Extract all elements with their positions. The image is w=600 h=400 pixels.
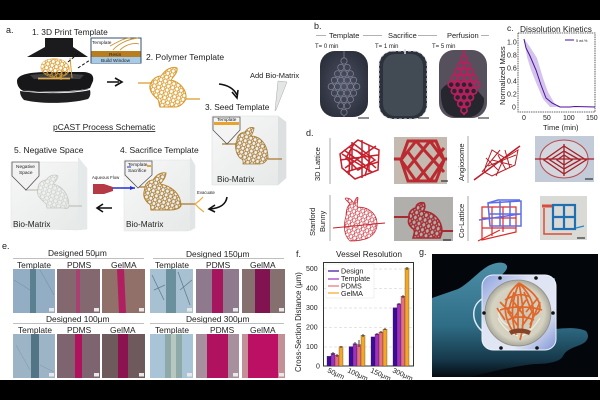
separators (330, 136, 468, 241)
bio-matrix cube step 4 sacrifice: Sacrifice (128, 168, 147, 174)
row labels: Co-Lattice (457, 204, 466, 238)
time labels (315, 44, 456, 50)
error bars (333, 267, 407, 357)
x axis labels: 300μm (391, 367, 414, 383)
bio-matrix cube step 4 sacrifice: Bio-Matrix (126, 219, 164, 229)
arrow: step 3 to 4 (209, 197, 227, 212)
legend: Design (341, 266, 363, 276)
y axis labels: 0 (512, 104, 516, 112)
y axis labels: 0.8 (507, 52, 517, 60)
grid (324, 269, 413, 347)
x axis labels: 50 (543, 115, 551, 122)
legend: 5 wt.% (576, 39, 588, 43)
group heading 100um (13, 314, 144, 324)
gloved hand (432, 263, 588, 377)
time labels: T= 1 min (375, 44, 399, 50)
group heading 150um (153, 249, 284, 259)
bio-matrix cube step 5 negative space: Space (19, 170, 33, 176)
micrographs 150um (150, 269, 285, 313)
icon: aqueous flow needle (92, 175, 135, 194)
plot frame (518, 33, 595, 112)
icon: 3D printer (17, 38, 93, 103)
black band top (0, 0, 600, 20)
y axis labels: 1.0 (507, 40, 517, 46)
panel e: vessel micrographs (2, 241, 285, 378)
black band bottom (0, 380, 600, 400)
panel label e: e. (2, 241, 10, 251)
screws (482, 276, 555, 350)
row labels: Stanford (308, 208, 317, 236)
bio-matrix cube step 4 sacrifice: Template (128, 162, 148, 168)
panel label d: d. (306, 128, 314, 138)
row labels: 3D Lattice (313, 147, 322, 181)
x axis labels: 50μm (326, 367, 345, 381)
bars 150um (371, 329, 387, 366)
column headers (316, 31, 489, 40)
column headers: Sacrifice (388, 31, 417, 40)
y axis labels (507, 40, 517, 112)
column headers: GelMA (250, 260, 276, 270)
arrow: step 1 to 2 (107, 78, 122, 86)
inset: build window: Resin (109, 52, 122, 58)
capsule sacrifice (379, 49, 427, 119)
step 2 heading: 2. Polymer Template (146, 52, 224, 62)
bio-matrix cube step 5 negative space: Bio-Matrix (13, 219, 51, 229)
y axis labels: 0.6 (507, 66, 517, 72)
column headers: Template (18, 325, 52, 335)
x axis labels: 150μm (369, 367, 392, 383)
panel f: vessel resolution bar chart (294, 249, 414, 383)
bio-matrix cube step 3: Bio-Matrix (217, 174, 255, 184)
evacuate flow (195, 190, 216, 212)
capsule perfusion (439, 50, 487, 118)
column headers: PDMS (67, 325, 92, 335)
column headers: Template (155, 325, 189, 335)
arrow: step 2 to 3 (219, 84, 238, 98)
y axis labels: 0.2 (507, 92, 517, 98)
inset: build window (91, 38, 141, 64)
y axis labels: 400 (306, 286, 318, 292)
chart title: Vessel Resolution (336, 249, 402, 259)
x axis labels: 100 (563, 115, 575, 122)
panel a: pCAST process schematic (6, 25, 299, 231)
model: co-lattice (478, 200, 521, 241)
y axis labels: 100 (306, 344, 318, 351)
bio-matrix cube step 4 sacrifice (124, 156, 195, 231)
confidence band (525, 40, 562, 107)
schematic title: pCAST Process Schematic (53, 122, 156, 132)
scale bars (49, 308, 284, 376)
panel b: template sacrifice perfusion (314, 21, 489, 119)
photo: 3D lattice (394, 137, 448, 184)
panel label b: b. (314, 21, 322, 31)
panel g: photo of device in gloved hand (419, 247, 598, 377)
step 1 heading: 1. 3D Print Template (32, 27, 108, 37)
model: angiosome (474, 146, 520, 180)
micrographs 300um (150, 334, 285, 378)
bio-matrix cube step 3 (212, 116, 286, 185)
column headers (17, 260, 276, 335)
bio-matrix cube step 3: Template (217, 117, 237, 123)
model: 3D lattice (340, 140, 379, 179)
device housing (482, 275, 556, 350)
y axis labels: 0 (316, 364, 320, 370)
arrow: step 5 from 4 (97, 204, 112, 212)
micrographs 50um (13, 269, 145, 313)
column headers: Template (17, 260, 51, 270)
row labels (308, 143, 466, 238)
y axis labels: 0.4 (507, 78, 517, 86)
polymer template bunny (138, 67, 200, 107)
column headers: Template (329, 31, 359, 40)
x axis title: Time (min) (543, 123, 579, 132)
photo: angiosome (535, 136, 594, 182)
photo background (432, 254, 598, 377)
bars 50um (327, 347, 343, 366)
dissolution curve (524, 39, 595, 107)
bio-matrix cube step 5 negative space: Negative (16, 164, 35, 170)
bio-matrix cube step 5 negative space (11, 157, 87, 230)
tube loop (474, 299, 482, 331)
column headers: PDMS (67, 260, 92, 270)
time labels: T= 0 min (315, 44, 339, 50)
y axis labels: 300 (306, 305, 318, 312)
model: stanford bunny (333, 197, 385, 241)
column headers: GelMA (110, 325, 136, 335)
column headers: PDMS (210, 325, 235, 335)
group heading 300um: Designed 300μm (186, 314, 250, 324)
panel label a: a. (6, 25, 14, 35)
row labels: Angiosome (457, 143, 466, 181)
legend: Template (341, 274, 370, 283)
inset: build window: Template (92, 40, 112, 46)
bars 100um (349, 335, 365, 366)
group heading 300um (150, 314, 284, 324)
x axis labels (326, 367, 414, 383)
column headers: Perfusion (447, 31, 479, 40)
bars 300um (393, 268, 409, 366)
legend (326, 264, 374, 298)
inset: build window: Build Window (101, 58, 131, 64)
icon: pipette (275, 81, 287, 111)
scale bars (358, 117, 489, 119)
panel label g: g. (419, 247, 427, 257)
y axis title: Cross-Section Distance (μm) (294, 272, 303, 372)
group heading 100um: Designed 100μm (46, 314, 110, 324)
time labels: T= 5 min (432, 44, 456, 50)
icon: aqueous flow needle: Aqueous Flow (92, 175, 120, 180)
capsule template (320, 51, 368, 117)
legend: GelMA (341, 289, 363, 298)
column headers: PDMS (206, 260, 231, 270)
panel label f: f. (296, 249, 301, 259)
chart title: Dissolution Kinetics (520, 24, 592, 34)
legend: PDMS (341, 282, 362, 290)
x axis labels: 150 (586, 115, 598, 122)
micrographs 100um (13, 334, 145, 378)
faint unfilled vessels (498, 308, 540, 336)
y axis labels (306, 266, 320, 370)
photo: co-lattice (540, 196, 587, 240)
row labels: Bunny (318, 210, 327, 232)
group heading 150um: Designed 150μm (186, 249, 250, 259)
photo: stanford bunny (394, 197, 453, 241)
y axis title: Normalized Mass (498, 46, 507, 105)
y axis labels: 200 (306, 324, 318, 332)
column headers: GelMA (111, 260, 137, 270)
add bio-matrix label: Add Bio-Matrix (250, 71, 299, 80)
column headers: GelMA (250, 325, 276, 335)
group heading 50um (13, 248, 144, 258)
step 3 heading: 3. Seed Template (205, 102, 270, 112)
group heading 50um: Designed 50μm (48, 248, 107, 258)
perfused vascular network (497, 283, 542, 340)
y axis labels: 500 (306, 266, 318, 273)
column headers: Template (155, 260, 189, 270)
panel c: dissolution kinetics chart (498, 23, 598, 132)
evacuate flow: Evacuate (197, 190, 216, 195)
x axis labels: 0 (522, 115, 526, 122)
x axis labels: 100μm (346, 367, 369, 383)
device dome (485, 280, 551, 346)
panel label c: c. (507, 23, 514, 33)
panel d: 3D vasculature gallery (306, 128, 594, 241)
plot frame (324, 262, 414, 366)
x axis labels (522, 115, 598, 122)
step 4 heading: 4. Sacrifice Template (120, 145, 199, 155)
step 5 heading: 5. Negative Space (14, 145, 84, 155)
